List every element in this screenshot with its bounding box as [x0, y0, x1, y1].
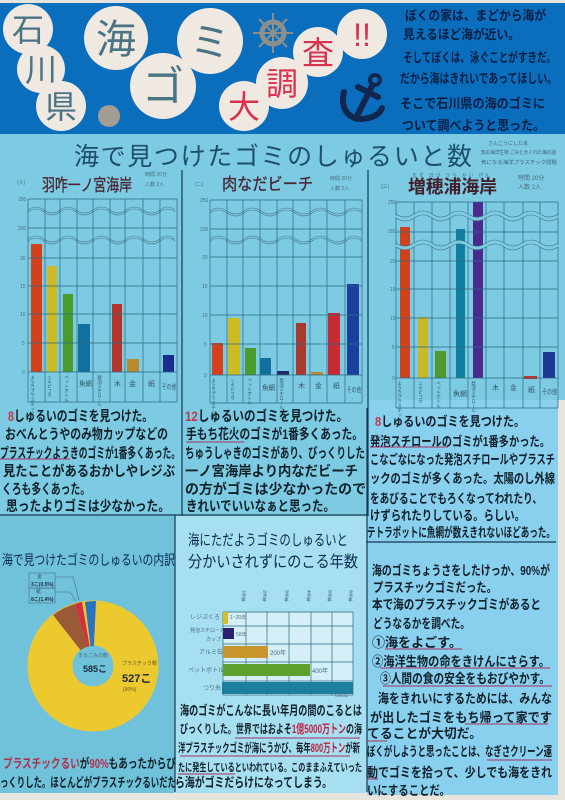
bars — [400, 202, 555, 379]
panel: conclusion text — [367, 563, 552, 798]
time and people note: 時間 20分 — [518, 174, 544, 182]
panel: left summary text: おべんとうやのみ物カップなどの — [5, 426, 168, 442]
title circle: ミ — [177, 8, 243, 74]
axis labels: 15 — [20, 284, 26, 290]
legend boxes — [29, 573, 79, 603]
axis labels: 20 — [390, 259, 396, 265]
category labels: ニキビコウ — [47, 375, 52, 398]
heading: 海にただようゴミのしゅるいと — [188, 531, 348, 549]
axis break waves — [28, 207, 175, 244]
reference note — [481, 140, 557, 166]
icon: anchor — [343, 75, 382, 119]
value labels — [230, 614, 348, 699]
reference note: 知の海洋生物 ごみとかくれた海の話 — [481, 149, 556, 156]
reference note: 気になる海洋プラスチック問題 — [481, 159, 557, 166]
paragraph: 洋プラスチックゴミが海にうかび、毎年800万トンが新 — [178, 740, 360, 755]
category labels: ニキビコウ — [230, 378, 236, 401]
title circle: 大 — [219, 81, 269, 131]
panel: left summary text: 8しゅるいのゴミを見つけた。 — [8, 408, 153, 424]
intro text block — [400, 8, 557, 133]
title circle: 石: 石 — [12, 12, 44, 48]
value labels: 50年 — [236, 631, 247, 638]
category labels: 発泡スチロール — [279, 377, 284, 410]
axis labels: 5 — [204, 342, 207, 348]
axis year labels: 300年 — [284, 590, 290, 603]
category labels: アルミ缶 — [199, 648, 223, 656]
category labels: その他 — [542, 387, 557, 396]
axis labels: 0 — [392, 376, 395, 382]
category labels — [30, 374, 176, 416]
axis year labels: 600年 — [348, 590, 354, 603]
icon: ship wheel — [253, 13, 293, 53]
time and people note: 人数 2人 — [330, 185, 349, 192]
panel: middle summary text: の方がゴミは少なかったので — [185, 481, 366, 497]
panel: middle summary text: きれいでいいなぁと思った。 — [186, 498, 335, 514]
axis labels: 20 — [20, 256, 26, 262]
chart title: 増穂浦海岸 — [408, 176, 497, 197]
axis year labels: 100年 — [241, 590, 246, 603]
panel: conclusion text: ①海をよごす。 — [372, 635, 462, 650]
heading — [188, 531, 358, 571]
underlines — [178, 738, 360, 774]
axis labels — [17, 180, 27, 376]
time and people note — [145, 171, 167, 188]
panel: right summary text — [367, 414, 555, 540]
donut center label — [78, 652, 108, 674]
value labels: 600年 — [335, 692, 348, 699]
intro text block: そこで石川県の海のゴミに — [400, 96, 545, 111]
panel: middle summary text — [185, 408, 366, 514]
axis labels: 250 — [18, 197, 27, 203]
panel dividers — [182, 170, 368, 516]
section dividers — [0, 408, 556, 792]
category labels: 紙 — [333, 381, 340, 390]
category labels: ようきプラスチック — [397, 381, 402, 422]
axis labels: 5 — [22, 341, 25, 347]
chart section background — [0, 134, 565, 516]
paragraph: たに発生しているといわれている。このままふえていった — [178, 760, 362, 774]
heading: 海で見つけたゴミのしゅるいの内訳 — [2, 552, 175, 568]
donut plastic label: 527こ — [122, 673, 151, 685]
panel: chart 2 — [195, 175, 362, 419]
category labels: 紙 — [528, 385, 535, 394]
category labels: カップ — [206, 637, 221, 643]
paragraph: 海のゴミがこんなに長い年月の間のこるとは — [180, 703, 362, 718]
underline — [186, 441, 244, 443]
axis labels: 0 — [204, 373, 207, 379]
title circle: 海: 海 — [96, 18, 136, 62]
chart background and grid — [223, 612, 353, 695]
donut plastic label — [122, 660, 157, 693]
axis labels: 200 — [18, 226, 27, 232]
reference note: さんこうにした本 — [488, 140, 528, 147]
title circle: 川: 川 — [25, 52, 57, 88]
axis labels: 0 — [22, 370, 25, 376]
chart title: 羽咋一ノ宮海岸 — [42, 176, 132, 195]
title circle: ゴ — [130, 53, 196, 119]
category labels: 木 — [298, 381, 305, 390]
underline — [370, 446, 448, 448]
category labels: ようきプラスチック — [30, 375, 36, 416]
axis labels — [381, 184, 397, 382]
axis labels — [195, 182, 209, 379]
panel: chart 3 — [381, 172, 558, 422]
intro text block: 見えるほど海が近い。 — [403, 27, 520, 42]
donut center label: 585こ — [83, 664, 107, 674]
axis labels: 200 — [388, 229, 397, 235]
title circle: 調 — [256, 57, 308, 109]
panel: conclusion text: てることが大切だ。 — [367, 726, 482, 741]
title circle: 川 — [17, 45, 65, 93]
ruby: ます ほづ うら かい がん — [412, 172, 490, 179]
title circle: 査 — [293, 27, 343, 77]
legend boxes: 3こ(0.5%) — [31, 582, 54, 588]
axis labels: 10 — [390, 316, 396, 322]
panel: left summary text — [0, 408, 180, 514]
axis labels: 10 — [202, 313, 208, 319]
title circle: ゴ: ゴ — [142, 63, 184, 110]
title circle: ミ: ミ — [190, 21, 230, 65]
category labels: 金 — [315, 381, 322, 390]
category labels: ニキビコウ — [418, 381, 424, 404]
category labels: その他 — [162, 382, 176, 391]
legend boxes: 8こ(1.4%) — [31, 597, 54, 603]
axis year labels — [241, 590, 354, 603]
panel: conclusion text: どうなるかを調べた。 — [373, 616, 470, 631]
category labels: ペットボトル — [188, 666, 224, 674]
donut caption: っくりした。ほとんどがプラスチックるいだた — [0, 775, 176, 790]
title circle: 調: 調 — [266, 66, 298, 102]
axis break waves — [210, 208, 362, 244]
panel: left summary text: プラスチックようきのゴミが1番多くあった。 — [0, 445, 180, 461]
panel: middle summary text: ちゅうしゃきのゴミがあり、びっくりした — [185, 445, 365, 461]
panel: conclusion text: プラスチックゴミだった。 — [373, 580, 497, 595]
panel: middle summary text: 一ノ宮海岸より内なだビーチ — [185, 463, 358, 479]
panel: bottom right background — [367, 400, 558, 795]
category labels: 魚網 — [262, 383, 275, 392]
value labels: 400年 — [312, 667, 328, 675]
donut — [50, 601, 136, 709]
axis labels: (人) — [17, 180, 26, 186]
time and people note — [518, 174, 544, 191]
category labels: 発泡スチロール — [471, 380, 476, 413]
category labels: レジぶくろ — [190, 614, 220, 621]
title circle: 海 — [84, 6, 148, 70]
title circle: exclamation marks: !! — [353, 17, 371, 53]
panel: chart 1 — [17, 171, 177, 416]
donut caption: プラスチックるいが90%もあったからび — [3, 756, 176, 771]
category labels: 金 — [129, 379, 136, 388]
category labels: 木 — [114, 379, 121, 388]
category labels: 紙 — [148, 379, 155, 388]
time and people note: 人数 2人 — [518, 183, 541, 191]
icon: shell — [98, 105, 120, 127]
axis labels: 250 — [200, 198, 209, 204]
value labels: 1~20年 — [230, 614, 246, 621]
legend boxes: 金 — [37, 573, 42, 580]
title circle: 大: 大 — [228, 89, 260, 125]
panel: donut chart — [0, 552, 176, 790]
category labels: 木 — [492, 383, 499, 392]
axis labels: 200 — [200, 227, 209, 233]
category labels: 魚網 — [79, 379, 92, 388]
panel: left summary text: くろも多くあった。 — [2, 481, 90, 497]
panel: conclusion text: が出したゴミをもち帰って家です — [370, 710, 552, 725]
panel: decomposition years chart — [175, 531, 362, 790]
axis year labels: 200年 — [262, 590, 268, 603]
category labels: ペットボトル — [436, 381, 442, 408]
category labels: つり糸 — [203, 684, 221, 692]
paragraph: ら海がゴミだらけになってしまう。 — [175, 775, 332, 790]
panel: middle summary text: 12しゅるいのゴミを見つけた。 — [185, 408, 348, 424]
grid — [28, 199, 177, 402]
underlines — [367, 649, 552, 779]
axis labels: 5 — [392, 345, 395, 351]
intro text block: ぼくの家は、まどから海が — [405, 8, 546, 23]
axis labels: 10 — [20, 312, 26, 318]
panel: left summary text: 思ったよりゴミは少なかった。 — [6, 498, 170, 514]
donut plastic label: (90%) — [123, 687, 137, 693]
title circle: 県 — [36, 81, 86, 131]
axis labels: 15 — [202, 284, 208, 290]
category labels: ペットボトル — [247, 378, 252, 405]
category labels: ようきプラスチック — [211, 378, 216, 419]
axis year labels: 400年 — [306, 590, 312, 603]
axis labels: (二) — [195, 182, 204, 188]
category labels — [397, 380, 557, 422]
panel: middle summary text: 手もち花火のゴミが1番多くあった。 — [186, 426, 363, 442]
category labels: その他 — [347, 385, 361, 394]
category labels — [211, 377, 361, 419]
bars — [212, 284, 359, 375]
title circle: exclamation marks — [337, 9, 387, 59]
legend boxes: 紙 — [36, 588, 41, 595]
bars — [31, 244, 174, 372]
category labels: 発泡スチロール — [190, 627, 225, 634]
grid — [396, 202, 558, 408]
axis labels: 15 — [390, 287, 396, 293]
panel: bottom middle background — [175, 516, 367, 793]
axis labels: 20 — [202, 255, 208, 261]
chart title: 肉なだビーチ — [222, 175, 313, 194]
time and people note: 時間 20分 — [330, 175, 352, 182]
underline — [0, 458, 70, 460]
section title: 海で見つけたゴミのしゅるいと数 — [74, 143, 472, 171]
donut center label: まるごみの数 — [78, 652, 108, 659]
right edge strip — [558, 400, 565, 800]
axis break waves — [396, 213, 558, 248]
heading: 分かいされずにのこる年数 — [188, 553, 358, 571]
category labels: 魚網 — [453, 389, 467, 398]
header banner — [0, 3, 565, 134]
title circle: 県: 県 — [45, 89, 77, 125]
category labels: 発泡スチロール — [97, 374, 102, 407]
paragraph — [175, 703, 362, 790]
category labels: 金 — [510, 383, 517, 392]
paragraph: びっくりした。世界ではおよそ1億5000万トンの海 — [180, 721, 362, 736]
time and people note: 人数 2人 — [145, 181, 164, 188]
donut caption — [0, 756, 176, 790]
panel: conclusion text: いにすることだ。 — [367, 783, 450, 798]
axis labels: 250 — [388, 200, 397, 206]
panel: right summary text: 8しゅるいのゴミを見つけた。 — [375, 414, 525, 429]
bars — [222, 612, 353, 694]
axis year labels: 500年 — [327, 590, 332, 603]
title circle: 査: 査 — [302, 35, 334, 71]
panel: right summary text: けずられたりしている。らしい。 — [370, 508, 525, 523]
title circle: 石 — [3, 4, 53, 54]
axis labels: (三) — [381, 184, 390, 190]
value labels: 200年 — [270, 649, 286, 657]
panel: left summary text: 見たことがあるおかしやレジぶ — [3, 463, 175, 479]
intro text block: ついて調べようと思った。 — [402, 118, 545, 133]
time and people note: 時間 20分 — [145, 171, 167, 178]
grid — [210, 200, 362, 403]
category labels — [188, 614, 225, 692]
donut plastic label: プラスチック類 — [122, 660, 157, 667]
time and people note — [330, 175, 352, 192]
panel: bottom left background — [0, 516, 175, 793]
category labels: ペットボトル — [64, 375, 70, 402]
